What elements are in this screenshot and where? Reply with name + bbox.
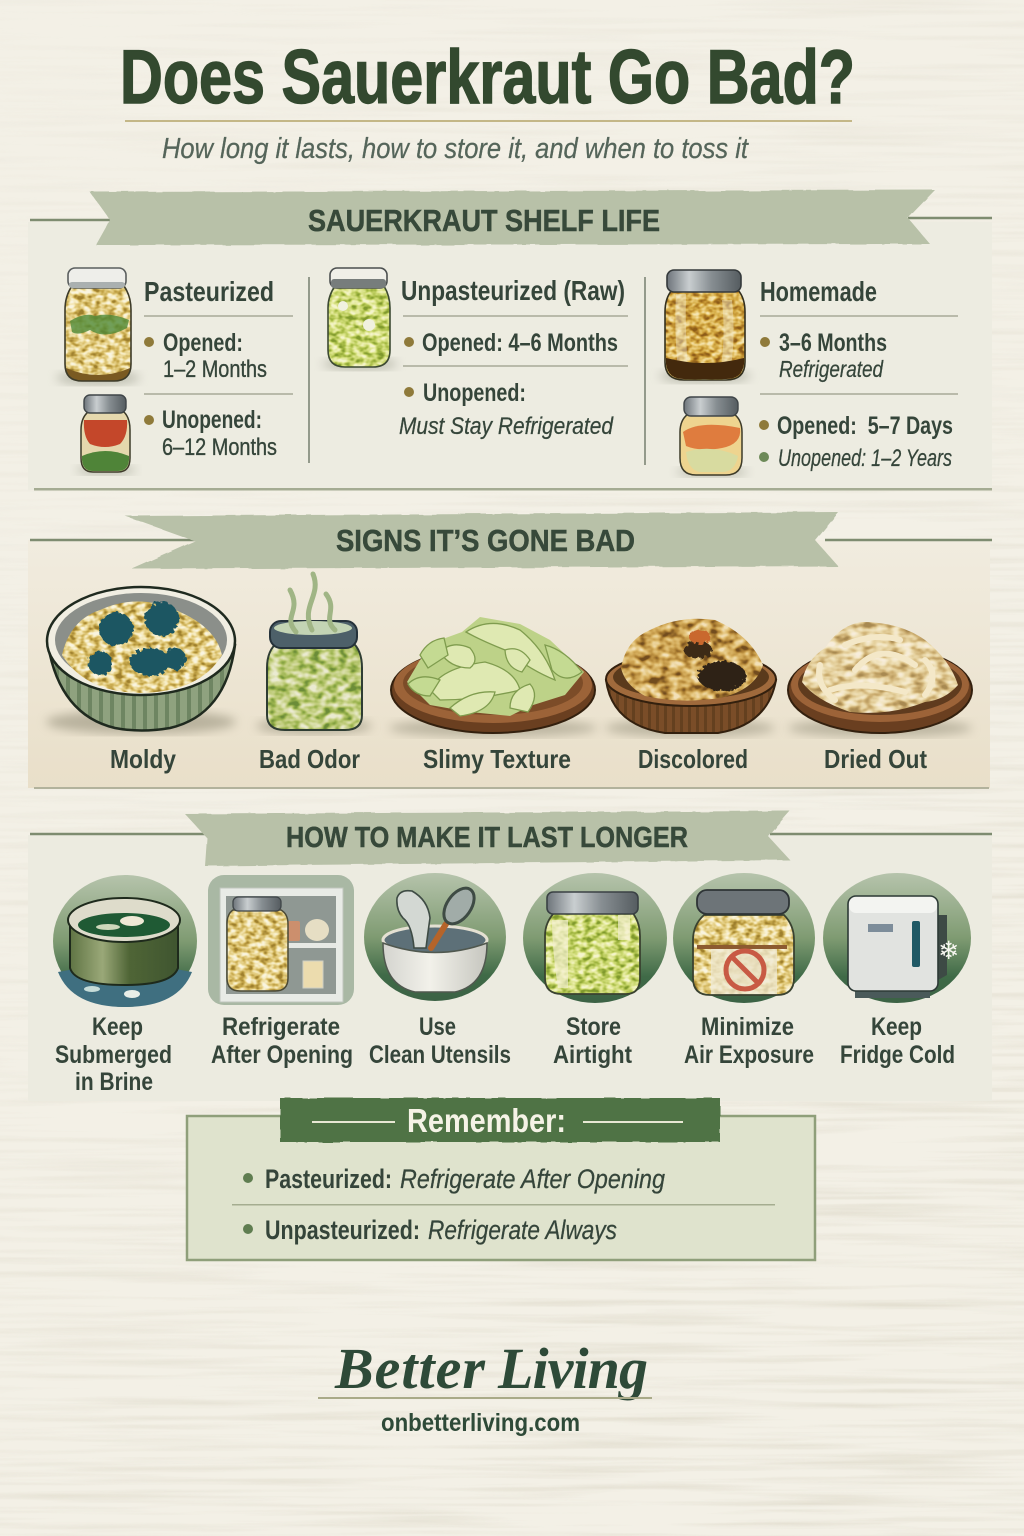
label: slimy texture: Slimy Texture bbox=[423, 744, 571, 774]
text: opened time: Opened: 5–7 Days bbox=[777, 412, 953, 440]
logo: better living: Living bbox=[497, 1336, 648, 1401]
label: use clean utensils bbox=[369, 1013, 511, 1069]
label: keep submerged in brine bbox=[55, 1013, 172, 1096]
icon: jar in fridge bbox=[208, 875, 354, 1005]
label: store airtight bbox=[553, 1013, 633, 1069]
panel: sauerkraut shelf life bbox=[28, 190, 992, 490]
text: unpasteurized heading: Unpasteurized (Raw) bbox=[401, 275, 625, 306]
label: refrigerate after opening: Refrigerate bbox=[222, 1013, 340, 1041]
sign: moldy bbox=[46, 587, 236, 774]
sign: slimy texture bbox=[389, 617, 597, 774]
text: refrigerated time: Refrigerated bbox=[779, 356, 884, 382]
tip: refrigerate after opening bbox=[208, 875, 354, 1069]
icon: jar with odor bbox=[256, 574, 372, 734]
heading banner: signs bbox=[125, 512, 838, 569]
heading banner: shelf life: SAUERKRAUT SHELF LIFE bbox=[308, 203, 660, 238]
heading banner: last longer bbox=[185, 811, 790, 866]
label: refrigerate after opening: After Opening bbox=[211, 1041, 353, 1069]
icon: plate of slimy cabbage bbox=[389, 617, 597, 737]
icon: fridge with snowflake bbox=[823, 873, 971, 1003]
label: keep submerged in brine: Submerged bbox=[55, 1041, 172, 1069]
label: minimize air exposure: Minimize bbox=[701, 1013, 794, 1041]
label: moldy: Moldy bbox=[110, 744, 176, 774]
column: pasteurized bbox=[56, 268, 293, 475]
callout header: Remember: bbox=[407, 1102, 566, 1139]
callout: remember bbox=[187, 1098, 815, 1260]
text: refrigerated time: 3–6 Months bbox=[779, 329, 887, 357]
text: homemade heading: Homemade bbox=[760, 276, 877, 307]
tip: keep fridge cold bbox=[823, 873, 971, 1069]
tip: store airtight bbox=[523, 873, 667, 1069]
reminder: unpasteurized: Refrigerate Always bbox=[428, 1215, 617, 1245]
sign: discolored bbox=[605, 619, 776, 774]
icon: crock in brine bbox=[53, 875, 197, 1007]
icon: homemade jar small bbox=[676, 397, 748, 477]
label: use clean utensils: Clean Utensils bbox=[369, 1041, 511, 1069]
text: unopened time: Unopened: 1–2 Years bbox=[778, 445, 952, 472]
icon: jar with no-air symbol bbox=[673, 873, 815, 1003]
text: unopened time: Unopened: bbox=[162, 406, 262, 434]
tip: use clean utensils bbox=[364, 873, 511, 1069]
text: opened time bbox=[163, 329, 267, 383]
label: minimize air exposure: Air Exposure bbox=[684, 1041, 814, 1069]
text: opened time: Opened: bbox=[163, 329, 243, 357]
label: keep fridge cold: Keep bbox=[871, 1013, 922, 1041]
label: refrigerate after opening bbox=[211, 1013, 353, 1069]
column: unpasteurized bbox=[322, 268, 628, 440]
label: store airtight: Store bbox=[566, 1013, 621, 1041]
reminder: unpasteurized bbox=[243, 1215, 617, 1245]
panel: signs it's gone bad bbox=[28, 512, 992, 789]
icon: pasteurized jar large bbox=[56, 268, 140, 385]
icon: airtight jar bbox=[523, 873, 667, 1003]
icon: pasteurized jar small bbox=[76, 395, 136, 475]
icon: fridge with snowflake: ❄ bbox=[938, 936, 959, 965]
text: pasteurized heading: Pasteurized bbox=[144, 276, 274, 307]
reminder: pasteurized: Refrigerate After Opening bbox=[400, 1164, 665, 1194]
icon: bowl of discolored kraut bbox=[605, 619, 776, 737]
label: keep submerged in brine: in Brine bbox=[75, 1068, 153, 1096]
label: keep fridge cold bbox=[840, 1013, 955, 1069]
label: dried out: Dried Out bbox=[824, 744, 927, 774]
icon: raw sauerkraut jar bbox=[322, 268, 398, 370]
label: store airtight: Airtight bbox=[553, 1041, 633, 1069]
callout header bbox=[280, 1098, 720, 1142]
reminder: pasteurized: Pasteurized: bbox=[265, 1164, 392, 1194]
sign: dried out bbox=[788, 622, 972, 774]
icon: plate of dried kraut bbox=[788, 622, 972, 737]
label: bad odor: Bad Odor bbox=[259, 744, 360, 774]
text: unopened note: Must Stay Refrigerated bbox=[399, 413, 614, 440]
text: unopened time bbox=[162, 406, 277, 461]
label: use clean utensils: Use bbox=[419, 1013, 456, 1041]
tip: keep submerged in brine bbox=[53, 875, 197, 1096]
icon: bowl with utensils bbox=[364, 873, 506, 1001]
tip: minimize air exposure bbox=[673, 873, 815, 1069]
label: minimize air exposure bbox=[684, 1013, 814, 1069]
sign: bad odor bbox=[256, 574, 372, 774]
label: keep submerged in brine: Keep bbox=[92, 1013, 143, 1041]
subtitle: How long it lasts, how to store it, and when to toss it bbox=[162, 133, 750, 165]
text: unopened time: 6–12 Months bbox=[162, 434, 277, 461]
heading banner: shelf life bbox=[90, 190, 935, 245]
text: opened time: Opened: 4–6 Months bbox=[422, 329, 618, 357]
label: keep fridge cold: Fridge Cold bbox=[840, 1041, 955, 1069]
icon: homemade jar large bbox=[659, 270, 751, 383]
panel: how to make it last longer bbox=[28, 811, 992, 1101]
website: onbetterliving.com bbox=[381, 1409, 580, 1437]
logo: better living bbox=[318, 1336, 652, 1437]
reminder: pasteurized bbox=[243, 1164, 665, 1194]
icon: bowl with mold bbox=[46, 587, 236, 734]
heading banner: signs: SIGNS IT’S GONE BAD bbox=[336, 523, 635, 558]
text: refrigerated time bbox=[779, 329, 887, 382]
logo: better living: Better bbox=[334, 1336, 485, 1401]
text: unopened note: Unopened: bbox=[423, 379, 526, 407]
reminder: unpasteurized: Unpasteurized: bbox=[265, 1215, 420, 1245]
column: homemade bbox=[659, 270, 958, 477]
label: discolored: Discolored bbox=[638, 744, 748, 774]
text: unopened note bbox=[399, 379, 614, 440]
heading banner: last longer: HOW TO MAKE IT LAST LONGER bbox=[286, 822, 688, 854]
text: opened time: 1–2 Months bbox=[163, 356, 267, 383]
